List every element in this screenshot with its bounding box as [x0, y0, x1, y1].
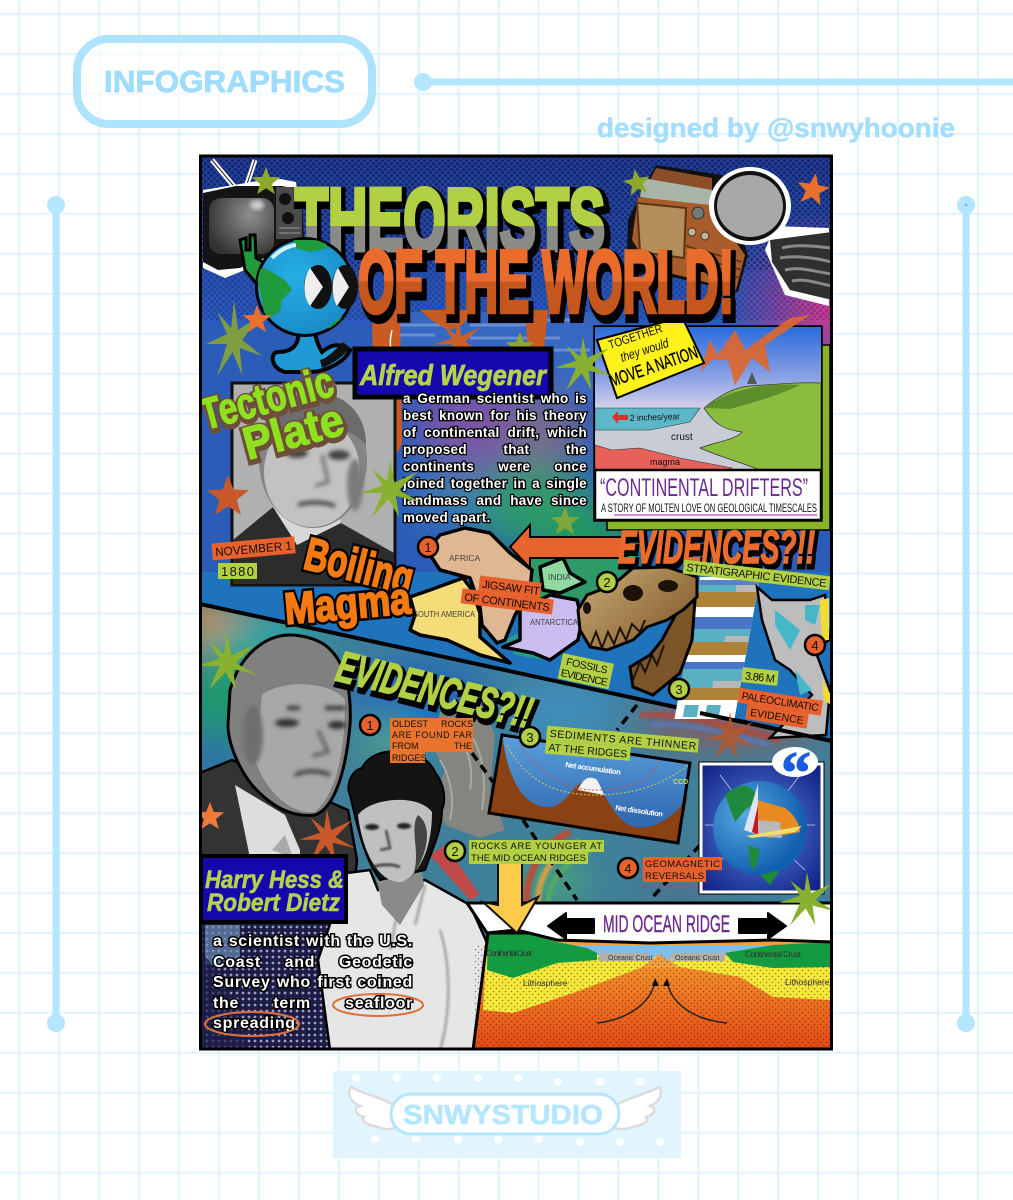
orange burst on panel [700, 315, 810, 385]
boiling magma lettering: Boiling [300, 527, 419, 604]
boiling magma lettering: Magma [283, 574, 413, 634]
illustration: drifting continents: 2 inches/year [630, 411, 680, 423]
antarctica [503, 595, 582, 660]
sediment diagram: Net dissolution [615, 803, 664, 819]
poster border [200, 156, 832, 1049]
paragraph: hess and dietz: Survey who first coined [213, 974, 413, 991]
old radio [626, 165, 748, 292]
date labels [211, 536, 296, 579]
circle 2 fossils: 2 [603, 575, 611, 590]
star on mascot [243, 305, 271, 332]
south america [410, 578, 510, 663]
water [550, 945, 773, 960]
label: jigsaw fit [461, 574, 556, 615]
heading: evidences lower: EVIDENCES?!! [334, 646, 539, 742]
circle 1 upper [418, 537, 438, 557]
mid ocean ridge banner: MID OCEAN RIDGE [603, 911, 730, 938]
continental crust right [725, 942, 832, 968]
tectonic plate lettering: Plate [237, 393, 349, 470]
orange burst lower right [705, 712, 755, 760]
sediment diagram: Net accumulation [565, 760, 622, 777]
label: jigsaw fit: JIGSAW FIT [481, 579, 541, 598]
cross section of ocean ridge: Continental Crust [745, 949, 802, 959]
diagonal divider repeat over artwork [700, 713, 832, 741]
paleoclimatic map [757, 587, 831, 738]
label: stratigraphic evidence: STRATIGRAPHIC EVIDENCE [686, 562, 827, 590]
title: theorists: THEORISTS [295, 170, 605, 269]
INFOGRAPHICS badge [77, 39, 372, 124]
banner arrow left [548, 913, 594, 939]
name box: alfred wegener: Alfred Wegener [359, 360, 547, 392]
circle 2 lower [445, 841, 465, 861]
label: oldest rocks: OLDEST [392, 719, 429, 729]
cross section of ocean ridge: Lithosphere [785, 977, 830, 987]
sediment diagram: CCD [673, 779, 688, 786]
stars mid [207, 460, 579, 534]
label: sediments thinner: AT THE RIDGES [548, 742, 628, 761]
heading: evidences lower [332, 642, 539, 742]
left wing [349, 1087, 401, 1129]
circle 4 lower: 4 [624, 861, 632, 876]
tectonic plate lettering [202, 366, 348, 466]
portrait: robert dietz [318, 751, 488, 1050]
cross section of ocean ridge: Continental Crust [486, 948, 533, 958]
name box: hess and dietz: Harry Hess & [205, 866, 344, 894]
highlight ovals [205, 994, 423, 1036]
paragraph: hess and dietz: a scientist with the U.S. [213, 933, 413, 950]
poster lower background map [202, 606, 830, 938]
banner arrow right [739, 913, 786, 939]
africa: AFRICA [449, 553, 480, 563]
circle 3 strata: 3 [675, 682, 683, 697]
label: fossils evidence: FOSSILS [565, 656, 609, 677]
date labels: NOVEMBER 1 [215, 539, 293, 559]
logo pill [391, 1094, 619, 1134]
portrait: harry hess [200, 635, 357, 880]
lime strip behind continental panel [607, 345, 830, 530]
circle 1 upper: 1 [424, 540, 432, 555]
boiling magma lettering: Boiling [300, 527, 419, 604]
tectonic plate lettering: Tectonic [195, 357, 339, 440]
paragraph: wegener: landmass and have since [403, 493, 587, 508]
title: theorists: THEORISTS [297, 174, 609, 273]
suit [233, 507, 394, 584]
yellow note: they would [618, 335, 671, 365]
label: oldest rocks: FROM [392, 741, 418, 751]
earth mascot [240, 235, 358, 372]
label: oldest rocks: ARE FOUND FAR [392, 730, 472, 740]
label: oldest rocks: ROCKS [441, 719, 473, 729]
yellow note: MOVE A NATION [607, 342, 700, 391]
boiling magma lettering: Magma [283, 574, 413, 634]
circle 1 lower [360, 715, 380, 735]
top connector line [414, 73, 1013, 91]
boiling magma lettering [282, 534, 416, 632]
panel: continental drifters [595, 315, 821, 520]
map: gondwana continents [410, 528, 585, 663]
paragraph: hess and dietz [210, 932, 416, 1040]
label: oldest rocks: THE [454, 741, 472, 751]
label: sediments thinner: SEDIMENTS ARE THINNER [549, 728, 697, 753]
dark halftone block under name [200, 923, 350, 1050]
circle 4 lower [618, 858, 638, 878]
paragraph: wegener: moved apart. [403, 510, 491, 525]
sediment diagram [489, 735, 690, 843]
poster upper background [200, 155, 832, 775]
mascot globe [255, 237, 355, 337]
paragraph: wegener: continents were once [403, 459, 587, 474]
heading: evidences lower: EVIDENCES?!! [332, 642, 537, 738]
yellow arrow down [483, 863, 538, 933]
poster [180, 155, 835, 1050]
india [540, 558, 585, 593]
antarctica: ANTARCTICA [530, 617, 578, 627]
diagonal divider [200, 604, 832, 741]
cross section of ocean ridge: Oceanic Crust [675, 955, 719, 962]
paragraph: wegener: of continental drift, which [403, 425, 587, 440]
magnifying glass with hand [709, 167, 832, 306]
mascot arm [238, 234, 263, 284]
fossil: t-rex skull [578, 567, 697, 695]
orange drips behind title [372, 310, 548, 456]
left side rail [47, 196, 65, 1032]
label: sediments thinner [545, 726, 699, 767]
panel caption [595, 470, 821, 520]
title: of the world [358, 248, 736, 324]
continental crust left [487, 930, 597, 978]
paragraph: wegener: best known for his theory [403, 408, 587, 423]
heading: evidences upper [618, 521, 817, 576]
cross section of ocean ridge [473, 930, 833, 1050]
INFOGRAPHICS badge: INFOGRAPHICS [104, 64, 345, 99]
illustration: drifting continents [595, 327, 821, 470]
cross section of ocean ridge: Lithosphere [523, 978, 568, 988]
circle 2 lower: 2 [451, 844, 459, 859]
label: paleoclimatic evidence: PALEOCLIMATIC [741, 690, 820, 714]
decorative stars top [206, 167, 832, 390]
south america: SOUTH AMERICA [413, 609, 475, 619]
stars on hess [196, 633, 355, 862]
washi tape logo: SNWYSTUDIO [403, 1099, 603, 1130]
date labels: 1880 [221, 564, 254, 579]
arrow to evidence [510, 525, 622, 568]
tectonic plate lettering: Tectonic [195, 359, 339, 442]
illustration: drifting continents: crust [671, 432, 693, 443]
label: 3.86 m [741, 667, 779, 686]
quote mark: “ [781, 740, 811, 806]
cross section of ocean ridge: Oceanic Crust [608, 955, 652, 962]
name box: hess and dietz [201, 856, 346, 922]
label: 3.86 m: 3.86 M [744, 670, 775, 686]
label: fossils evidence [558, 653, 614, 689]
india: INDIA [548, 572, 571, 582]
heading: evidences upper: EVIDENCES?!! [620, 524, 817, 576]
paragraph: wegener [400, 390, 590, 530]
label: fossils evidence: EVIDENCE [560, 667, 609, 689]
paragraph: wegener: proposed that the [403, 442, 587, 457]
mid ocean ridge banner [467, 903, 832, 943]
head [259, 392, 367, 528]
illustration: drifting continents: magma [650, 457, 680, 467]
paragraph: hess and dietz: the term seafloor [213, 994, 413, 1012]
label: oldest rocks: RIDGES [392, 753, 427, 763]
label: geomagnetic reversals [643, 857, 722, 882]
circle 4 climate: 4 [811, 638, 819, 653]
right wing [609, 1087, 661, 1129]
label: paleoclimatic evidence [735, 688, 823, 731]
name box: alfred wegener [355, 349, 551, 397]
africa [427, 528, 532, 643]
washi tape logo [333, 1071, 681, 1158]
label: paleoclimatic evidence: EVIDENCE [749, 707, 805, 727]
label: geomagnetic reversals: REVERSALS [645, 871, 704, 882]
mascot eyes [304, 265, 332, 309]
paragraph: hess and dietz: spreading [213, 1015, 296, 1032]
circle 2 fossils [597, 572, 617, 592]
heading: evidences upper: EVIDENCES?!! [618, 521, 815, 573]
right side rail [957, 196, 975, 1032]
title: theorists [294, 186, 611, 261]
yellow note [597, 317, 704, 398]
label: jigsaw fit: OF CONTINENTS [464, 592, 550, 614]
retro tv [203, 160, 304, 278]
lime burst bottom right [779, 872, 835, 925]
tape hearts [352, 1074, 664, 1146]
yellow lithosphere [483, 955, 832, 1013]
circle 4 climate [805, 635, 825, 655]
paragraph: wegener: a German scientist who is [403, 391, 587, 406]
mascot legs [273, 330, 350, 372]
quote mark [772, 740, 818, 806]
circle 3 lower: 3 [526, 730, 534, 745]
designer credit: designed by @snwyhoonie [597, 113, 955, 143]
panel caption: “CONTINENTAL DRIFTERS” [600, 474, 808, 502]
label: rocks younger: ROCKS ARE YOUNGER AT [471, 841, 602, 852]
circle 3 lower [520, 727, 540, 747]
tectonic plate lettering: Plate [238, 395, 350, 472]
paragraph: wegener: joined together in a single [403, 476, 587, 491]
label: oldest rocks [390, 718, 473, 763]
oceanic crust [599, 953, 652, 961]
name box: hess and dietz: Robert Dietz [207, 889, 340, 917]
stratigraphic chart [674, 577, 760, 719]
panel caption: A STORY OF MOLTEN LOVE ON GEOLOGICAL TIMESCALES [601, 501, 817, 515]
portrait: alfred wegener [232, 383, 395, 585]
yellow note: TOGETHER [607, 321, 664, 352]
label: rocks younger: THE MID OCEAN RIDGES [471, 853, 586, 864]
paragraph: hess and dietz: Coast and Geodetic [213, 954, 413, 970]
globe inset panel [699, 762, 824, 894]
label: rocks younger [469, 840, 604, 864]
label: geomagnetic reversals: GEOMAGNETIC [645, 859, 720, 870]
circle 1 lower: 1 [366, 718, 374, 733]
circle 3 strata [669, 679, 689, 699]
